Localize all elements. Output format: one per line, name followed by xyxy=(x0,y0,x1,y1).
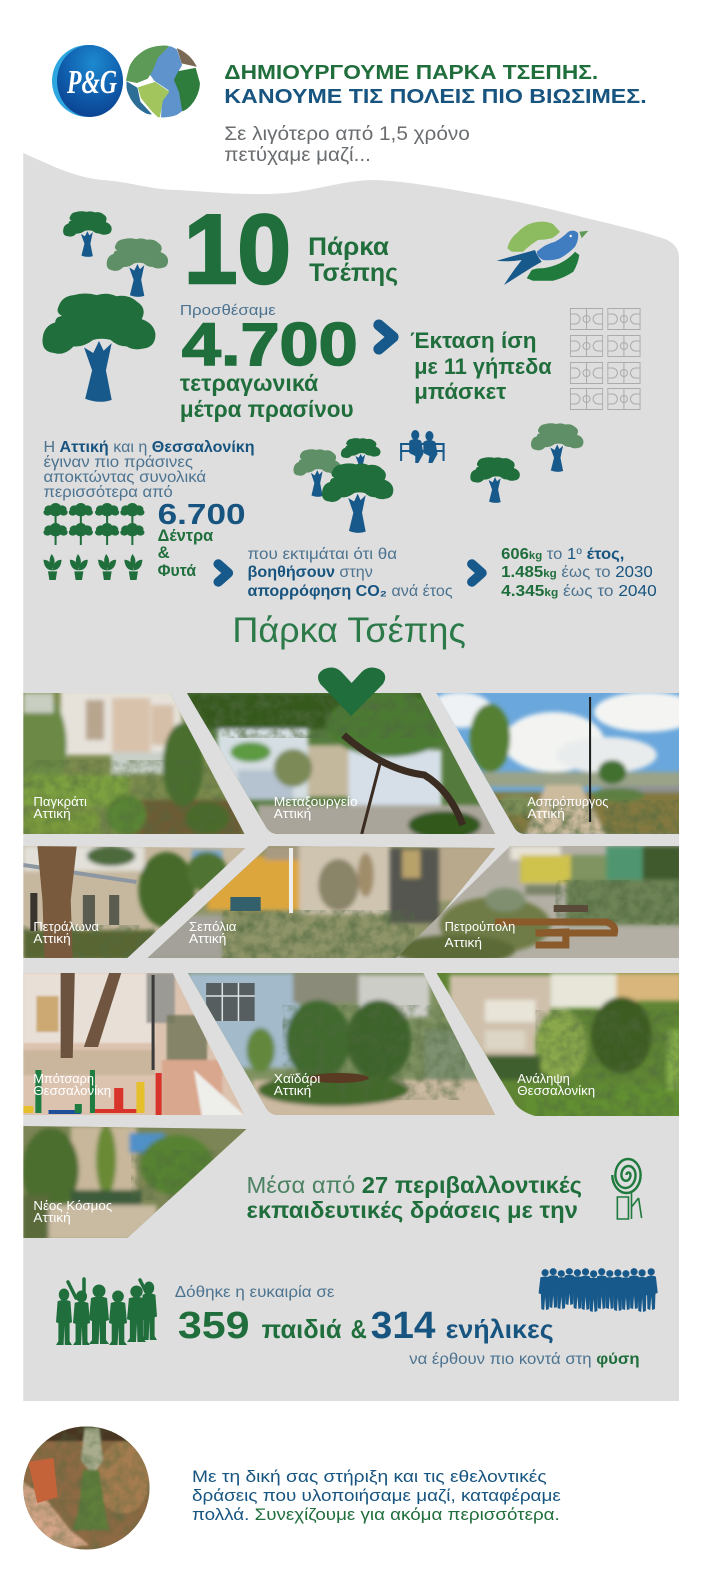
photo captions: Μεταξουργείο xyxy=(274,795,358,809)
stat: 6700 trees and plants: 6.700 xyxy=(158,499,246,531)
icon: tree grid xyxy=(43,503,144,545)
stat: 10 parks: Τσέπης xyxy=(309,259,398,287)
text: kg figures: έτος, xyxy=(582,545,624,563)
photo: Sepolia xyxy=(141,844,500,960)
photo captions xyxy=(33,795,608,1225)
photo captions: Αττική xyxy=(33,807,71,821)
icon: people on bench xyxy=(400,430,445,463)
text: kg figures: 1.485kg έως το 2030 xyxy=(501,563,653,581)
icon: bird logo xyxy=(497,222,588,285)
icon: adults crowd xyxy=(539,1268,658,1312)
text: opportunity: Δόθηκε η ευκαιρία σε xyxy=(175,1284,334,1301)
icon: trees right xyxy=(470,423,583,503)
photo captions: Ασπρόπυργος xyxy=(527,795,608,809)
stat: 4700 sq m xyxy=(180,302,358,422)
logo: P&G: P&G xyxy=(66,64,117,101)
text: area equal to 11 courts: με 11 γήπεδα xyxy=(414,354,552,379)
subtitle xyxy=(224,124,470,166)
photo captions: Παγκράτι xyxy=(33,795,87,809)
icon: tree cluster xyxy=(293,438,393,533)
text: area equal to 11 courts: Έκταση ίση xyxy=(410,328,537,353)
icon: children silhouettes xyxy=(56,1279,157,1345)
photo captions: Θεσσαλονίκη xyxy=(517,1084,595,1098)
logo: P&G xyxy=(52,45,123,117)
text: CO2 absorption: βοηθήσουν στην xyxy=(248,563,373,581)
stat: 4700 sq m: Προσθέσαμε xyxy=(180,302,276,319)
text: 27 environmental actions: εκπαιδευτικές δράσεις με την xyxy=(247,1197,578,1223)
stat: 10 parks xyxy=(184,194,398,304)
text: kg figures xyxy=(501,545,657,600)
icon: plant row xyxy=(43,554,142,580)
text: closing message: δράσεις που υλοποιήσαμε μαζί, καταφέραμε xyxy=(192,1486,561,1505)
arrow: chevron 2 xyxy=(218,564,228,582)
title: ΔΗΜΙΟΥΡΓΟΥΜΕ ΠΑΡΚΑ ΤΣΕΠΗΣ. xyxy=(224,62,598,84)
photo: Botsari xyxy=(23,973,251,1118)
text: Attica and Thessaloniki: αποκτώντας συνολικά xyxy=(43,469,206,486)
icon: trees top left xyxy=(42,211,168,402)
photo: Petralona xyxy=(23,846,248,960)
photo captions: Νέος Κόσμος xyxy=(33,1199,112,1213)
title: ΚΑΝΟΥΜΕ ΤΙΣ ΠΟΛΕΙΣ ΠΙΟ ΒΙΩΣΙΜΕΣ. xyxy=(224,86,647,108)
stat: 4700 sq m: μέτρα πρασίνου xyxy=(180,396,354,422)
title xyxy=(224,62,647,108)
stat: 359 children and 314 adults: & xyxy=(351,1314,367,1344)
text: CO2 absorption: που εκτιμάται ότι θα xyxy=(248,545,397,563)
photo: Pagkrati xyxy=(18,690,251,836)
photo: Neos Kosmos xyxy=(22,1125,251,1240)
text: kg figures: 4.345 kg έως το 2040 xyxy=(501,582,657,600)
photo: Metaxourgeio xyxy=(187,693,500,839)
stat: 359 children and 314 adults: 359 xyxy=(178,1304,250,1347)
subtitle: πετύχαμε μαζί... xyxy=(224,145,371,166)
icon: spiral logo xyxy=(612,1159,642,1219)
photo captions: Πετρούπολη xyxy=(445,920,515,934)
arrow: chevron 3 xyxy=(472,564,482,582)
photo captions: Αττική xyxy=(445,936,482,950)
photo captions: Μπότσαρη xyxy=(33,1072,94,1086)
photo: Haidari xyxy=(188,973,500,1118)
heading: pocket parks: Πάρκα Τσέπης xyxy=(232,611,466,650)
panel: grey background xyxy=(23,153,679,1401)
photo captions: Αττική xyxy=(274,1084,311,1098)
text: area equal to 11 courts: μπάσκετ xyxy=(414,379,506,404)
stat: 6700 trees and plants xyxy=(158,499,246,580)
stat: 359 children and 314 adults: παιδιά xyxy=(262,1314,342,1344)
photo captions: Σεπόλια xyxy=(189,920,236,934)
stat: 6700 trees and plants: & xyxy=(158,543,170,562)
text: closer to nature: να έρθουν πιο κοντά στη φύση xyxy=(409,1351,640,1368)
stat: 6700 trees and plants: Δέντρα xyxy=(158,526,214,545)
text: Attica and Thessaloniki: περισσότερα από xyxy=(43,484,173,501)
photo captions: Αττική xyxy=(274,807,311,821)
photo captions: Θεσσαλονίκη xyxy=(33,1084,111,1098)
text: CO2 absorption: απορρόφηση CO₂ ανά έτος xyxy=(248,582,453,600)
photo: Aspropyrgos xyxy=(436,693,679,834)
photo: planting circle xyxy=(20,1425,152,1552)
stat: 10 parks: Πάρκα xyxy=(308,233,390,261)
stat: 359 children and 314 adults xyxy=(178,1304,554,1347)
photo: Petroupoli xyxy=(394,846,683,965)
text: area equal to 11 courts xyxy=(410,328,552,404)
subtitle: Σε λιγότερο από 1,5 χρόνο xyxy=(224,124,470,145)
icon: green heart chevron xyxy=(318,668,385,716)
photo captions: Ανάληψη xyxy=(517,1072,570,1086)
photo captions: Αττική xyxy=(527,807,565,821)
text: Attica and Thessaloniki: Η Αττική και η Θεσσαλονίκη xyxy=(43,439,255,456)
text: Attica and Thessaloniki xyxy=(43,439,255,501)
text: kg figures: 606kg το 1 xyxy=(501,545,576,563)
arrow: chevron 1 xyxy=(379,325,393,349)
text: closing message: πολλά. Συνεχίζουμε για ακόμα περισσότερα. xyxy=(192,1505,560,1524)
stat: 359 children and 314 adults: 314 xyxy=(371,1304,436,1347)
text: 27 environmental actions xyxy=(247,1172,582,1223)
text: 27 environmental actions: Μέσα από 27 περιβαλλοντικές xyxy=(247,1172,582,1198)
text: closing message xyxy=(192,1467,561,1524)
stat: 10 parks: 10 xyxy=(184,194,291,304)
stat: 4700 sq m: τετραγωνικά xyxy=(180,370,318,396)
logo: globe xyxy=(127,46,200,117)
icon: basketball courts xyxy=(570,308,640,410)
stat: 6700 trees and plants: Φυτά xyxy=(158,561,197,580)
stat: 359 children and 314 adults: ενήλικες xyxy=(446,1314,554,1344)
text: closing message: Με τη δική σας στήριξη και τις εθελοντικές xyxy=(192,1467,547,1486)
stat: 4700 sq m: 4.700 xyxy=(182,310,358,378)
photo captions: Αττική xyxy=(33,932,71,946)
photo: Analipsi xyxy=(436,973,682,1119)
photo captions: Αττική xyxy=(33,1211,71,1225)
photo captions: Αττική xyxy=(189,932,226,946)
text: kg figures: ο xyxy=(576,546,582,557)
photo captions: Χαϊδάρι xyxy=(274,1072,321,1086)
photo captions: Πετράλωνα xyxy=(33,920,99,934)
text: Attica and Thessaloniki: έγιναν πιο πράσινες xyxy=(43,454,194,471)
text: CO2 absorption xyxy=(248,545,453,600)
